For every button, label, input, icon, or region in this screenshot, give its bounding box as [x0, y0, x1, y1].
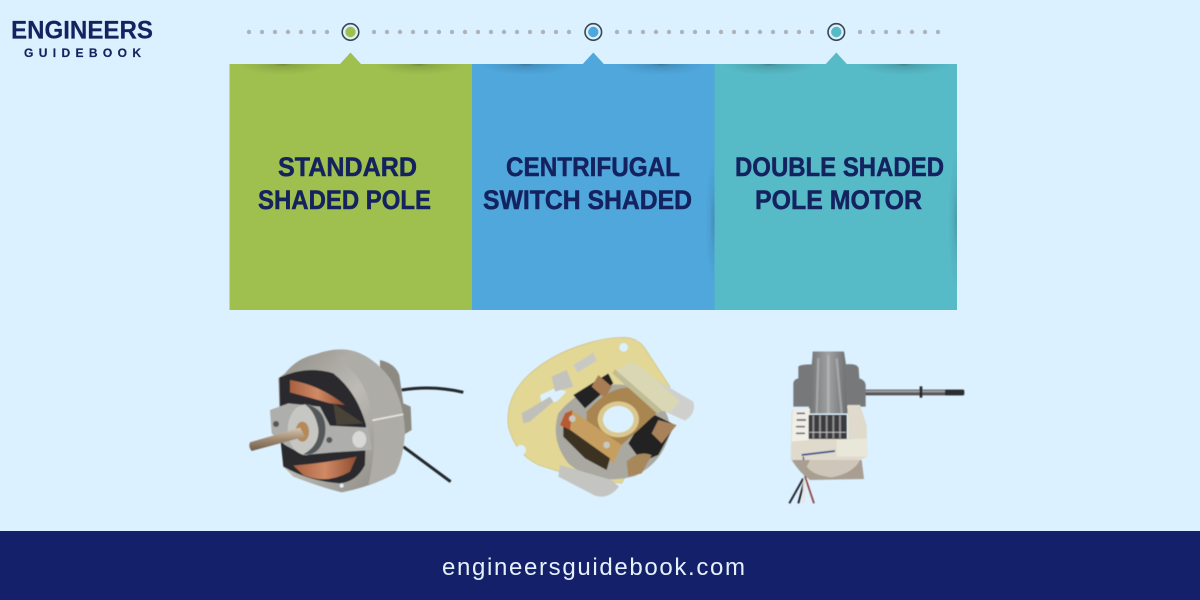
timeline marker: green	[342, 24, 359, 40]
heading: centrifugal switch shaded: CENTRIFUGAL	[506, 152, 680, 182]
heading: standard shaded pole: SHADED POLE	[258, 185, 431, 215]
heading: double shaded pole motor: POLE MOTOR	[755, 185, 922, 215]
heading: standard shaded pole: STANDARD	[278, 152, 417, 182]
logo: Engineers Guidebook: ENGINEERS	[11, 16, 153, 44]
heading: double shaded pole motor: DOUBLE SHADED	[735, 152, 944, 182]
timeline dots	[247, 30, 940, 34]
logo: Engineers Guidebook	[11, 16, 153, 60]
timeline marker: blue	[585, 24, 602, 40]
motor photo: double shaded pole motor	[789, 352, 964, 503]
heading: double shaded pole motor	[735, 152, 944, 215]
footer website address: engineersguidebook.com	[442, 554, 745, 581]
footer band	[0, 531, 1200, 600]
heading: centrifugal switch shaded	[483, 152, 692, 215]
heading: centrifugal switch shaded: SWITCH SHADED	[483, 185, 692, 215]
motor photo: standard shaded pole	[249, 349, 463, 492]
motor photo: centrifugal switch assembly	[508, 337, 694, 497]
timeline marker: teal	[828, 24, 845, 40]
panel: double shaded pole motor	[714, 52, 957, 310]
panel: centrifugal switch shaded	[472, 52, 714, 310]
heading: standard shaded pole	[258, 152, 431, 215]
panel: standard shaded pole	[230, 52, 472, 310]
logo: Engineers Guidebook: GUIDEBOOK	[24, 46, 141, 60]
